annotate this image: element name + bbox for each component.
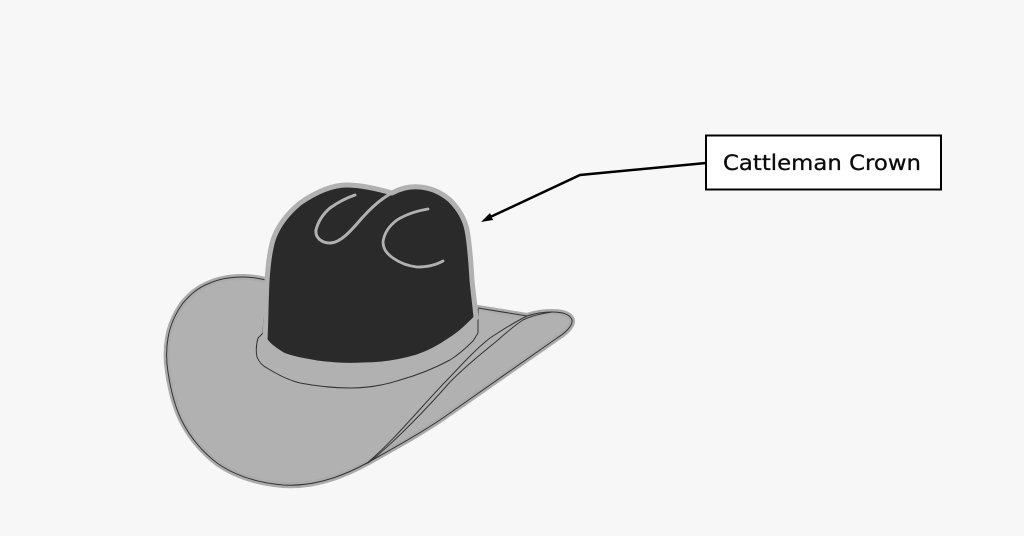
crown crease left xyxy=(316,193,392,243)
brim fold lines xyxy=(366,312,552,464)
hat brim xyxy=(166,277,572,485)
hat band xyxy=(257,300,478,388)
callout: Cattleman Crown xyxy=(706,136,941,190)
crown crease right xyxy=(383,209,443,267)
crown xyxy=(265,185,476,365)
hat illustration xyxy=(166,185,572,485)
hat band outline xyxy=(256,281,478,388)
arrow xyxy=(481,163,706,222)
callout: Cattleman Crown: Cattleman Crown xyxy=(723,151,921,175)
